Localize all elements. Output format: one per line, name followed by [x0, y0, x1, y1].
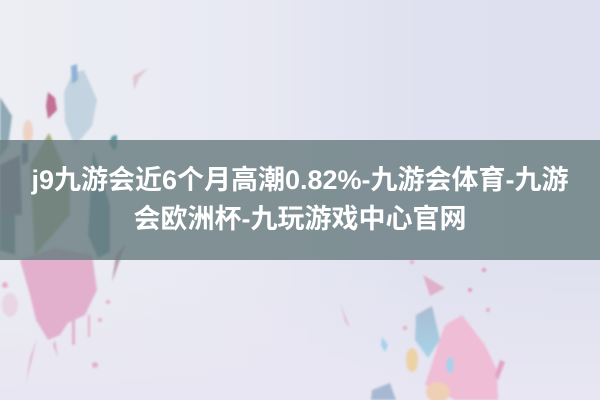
left pink splash [2, 243, 126, 383]
banner strip [0, 140, 600, 260]
right pink splash and crystals [340, 260, 505, 400]
upper left crystal cluster [0, 64, 148, 258]
title [31, 165, 569, 234]
title: j9九游会近6个月高潮0.82%-九游会体育-九游 [31, 165, 569, 195]
title: 会欧洲杯-九玩游戏中心官网 [134, 204, 466, 234]
lower page pale wash [0, 240, 600, 400]
